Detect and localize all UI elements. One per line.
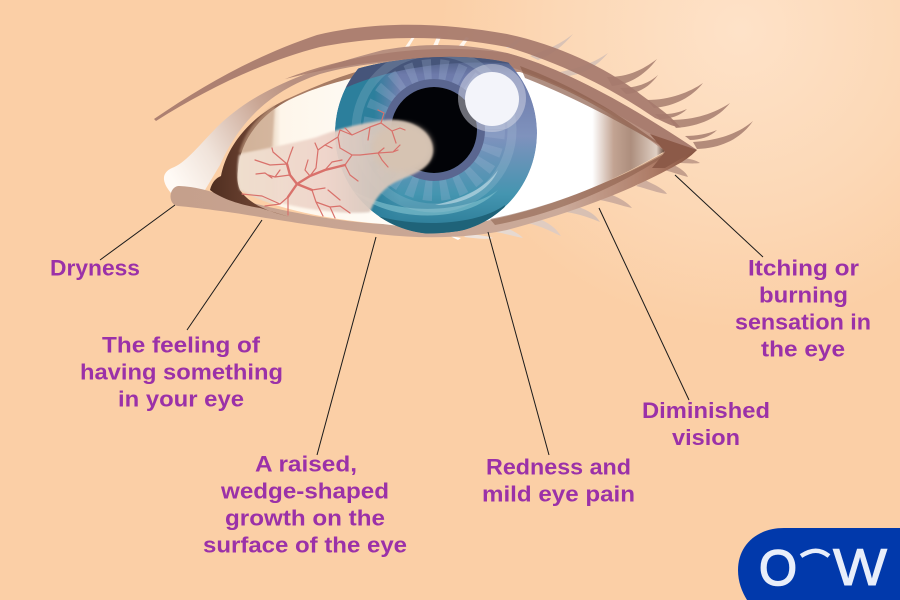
label: redness and pain: Redness and bbox=[486, 454, 631, 480]
label: redness and pain bbox=[482, 454, 635, 506]
sclera left shadow bbox=[239, 105, 275, 153]
label: dryness: Dryness bbox=[50, 256, 140, 280]
inner iris ring bbox=[387, 83, 481, 177]
logo badge bbox=[738, 528, 900, 600]
label: wedge-shaped growth: A raised, bbox=[255, 452, 357, 476]
lid top band shading bbox=[285, 49, 697, 152]
label: itching or burning bbox=[735, 256, 871, 362]
logo letter O: O bbox=[759, 540, 797, 596]
lower lid lashes bbox=[450, 158, 700, 240]
white upper lashes bbox=[403, 37, 523, 50]
eye illustration bbox=[154, 25, 753, 240]
dark inner canthus bbox=[210, 68, 370, 217]
label: wedge-shaped growth bbox=[203, 452, 407, 558]
pupil bbox=[391, 87, 477, 173]
outer corner bbox=[650, 134, 697, 168]
label: wedge-shaped growth: surface of the eye bbox=[203, 532, 407, 558]
label: feeling of something in eye: The feeling of bbox=[102, 332, 261, 358]
label: itching or burning: the eye bbox=[761, 336, 845, 362]
leader lines bbox=[100, 175, 763, 455]
label: feeling of something in eye: having something bbox=[80, 360, 283, 384]
upper eyelid bbox=[164, 45, 697, 193]
highlight bbox=[465, 72, 519, 126]
logo letter W: W bbox=[833, 539, 887, 597]
iris outer light ring bbox=[356, 52, 512, 208]
eyebrow crease bbox=[154, 25, 680, 127]
iris top dark band bbox=[346, 56, 510, 88]
iris lower dark band bbox=[378, 205, 505, 234]
iris crescent bbox=[435, 170, 498, 205]
label: feeling of something in eye: in your eye bbox=[118, 386, 244, 412]
iris lower light band bbox=[372, 190, 498, 216]
upper lid dark line bbox=[520, 66, 668, 150]
pterygium growth bbox=[238, 120, 433, 213]
label: diminished vision: vision bbox=[672, 425, 740, 450]
pterygium head bbox=[372, 124, 432, 172]
iris bbox=[335, 56, 537, 234]
iris rim right bbox=[492, 60, 540, 235]
lower eyelid bbox=[170, 150, 697, 237]
label: diminished vision bbox=[642, 398, 770, 450]
label: wedge-shaped growth: wedge-shaped bbox=[220, 478, 389, 504]
label: redness and pain: mild eye pain bbox=[482, 482, 635, 506]
highlight halo bbox=[458, 64, 526, 132]
blood vessels bbox=[242, 110, 405, 218]
label: itching or burning: sensation in bbox=[735, 310, 871, 334]
iris spokes ring bbox=[374, 70, 494, 190]
logo arc bbox=[801, 551, 829, 556]
lower lid dark line bbox=[490, 152, 668, 225]
label: diminished vision: Diminished bbox=[642, 398, 770, 423]
label: itching or burning: Itching or bbox=[748, 256, 859, 280]
label: feeling of something in eye bbox=[80, 332, 283, 412]
label: itching or burning: burning bbox=[759, 282, 848, 308]
sclera bbox=[237, 72, 665, 227]
upper eyelashes bbox=[530, 34, 753, 149]
label: wedge-shaped growth: growth on the bbox=[225, 506, 385, 530]
